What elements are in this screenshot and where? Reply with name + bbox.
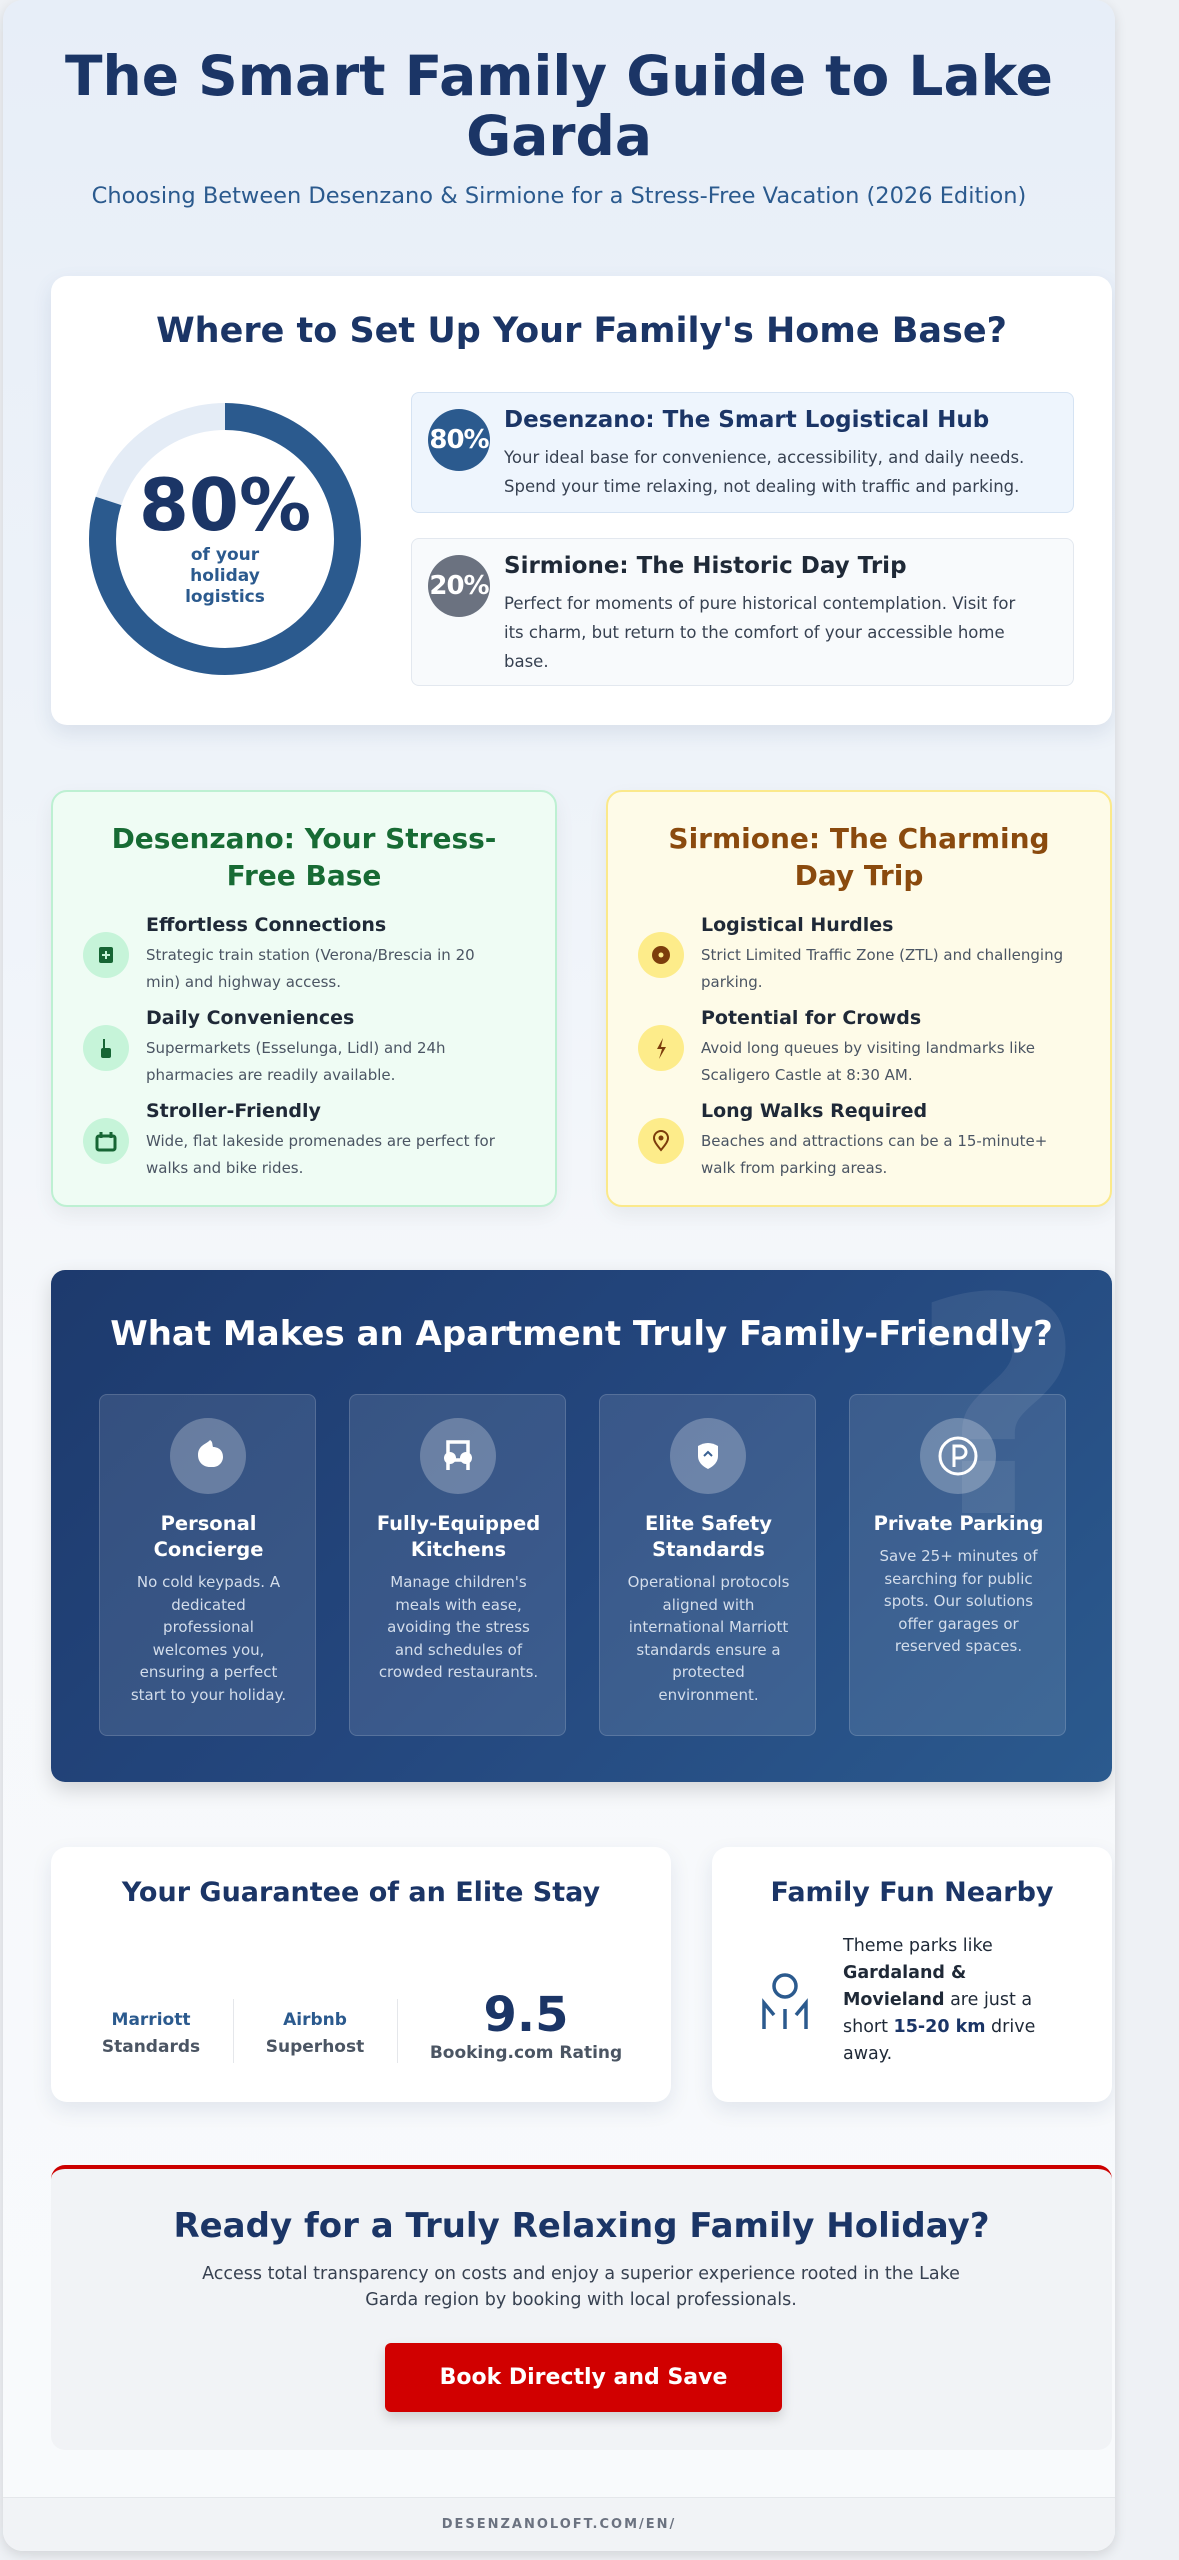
item: conveniences: Daily Conveniences [146, 1007, 354, 1029]
feature: kitchens: Fully-Equipped [377, 1512, 540, 1535]
item: hurdles: Logistical Hurdles [701, 914, 894, 936]
panel: family fun [712, 1847, 1112, 2102]
donut chart 80%: 80% [139, 463, 311, 547]
stat: Airbnb: Superhost [266, 2037, 364, 2057]
option: Desenzano: Desenzano: The Smart Logistical Hub [504, 407, 989, 433]
heading [112, 822, 496, 892]
item: connections: Strategic train station (Verona/Brescia in 20 min) and highway access. [146, 946, 475, 991]
badge 20% [428, 555, 490, 617]
heading: What Makes an Apartment Truly Family-Friendly? [110, 1314, 1053, 1354]
icon: no entry [638, 932, 684, 978]
item: walks: Beaches and attractions can be a 15-minute+ walk from parking areas. [701, 1132, 1047, 1177]
feature: safety: Operational protocols aligned with international Marriott standards ensure a protected environment. [628, 1573, 789, 1704]
item: hurdles: Strict Limited Traffic Zone (ZTL) and challenging parking. [701, 946, 1063, 991]
footer: DESENZANOLOFT.COM/EN/ [442, 2517, 676, 2532]
icon: kitchen [420, 1418, 496, 1494]
panel: Desenzano pros [51, 790, 557, 1207]
item: walks: Long Walks Required [701, 1100, 927, 1122]
feature: kitchens [349, 1394, 566, 1736]
feature: concierge [99, 1394, 316, 1736]
stat: Marriott [102, 2010, 200, 2057]
feature: parking: Private Parking [874, 1512, 1043, 1535]
icon: family [762, 1973, 808, 2029]
badge 80%: 80% [429, 425, 489, 455]
item: connections [83, 914, 475, 991]
feature: concierge: Personal [161, 1512, 256, 1535]
stat: Airbnb: Airbnb [283, 2010, 347, 2030]
option: Sirmione: Perfect for moments of pure historical contemplation. Visit for its charm, but return to the comfort of your accessible home base. [504, 594, 1015, 671]
stat: booking rating [430, 1987, 622, 2063]
option: Sirmione: Sirmione: The Historic Day Trip [504, 553, 907, 579]
heading: Sirmione: The Charming [668, 822, 1050, 855]
feature: safety: Standards [652, 1538, 765, 1561]
stat: Marriott: Standards [102, 2037, 200, 2057]
feature: safety [599, 1394, 816, 1736]
panel: Sirmione cons [606, 790, 1112, 1207]
icon: shop [83, 1025, 129, 1071]
option: Sirmione [411, 538, 1074, 686]
paragraph [202, 2264, 960, 2310]
paragraph: Garda region by booking with local professionals. [365, 2290, 797, 2310]
paragraph: Access total transparency on costs and enjoy a superior experience rooted in the Lake [202, 2264, 960, 2284]
panel: guarantee [51, 1847, 671, 2102]
stat: Airbnb [266, 2010, 364, 2057]
option: Desenzano [411, 392, 1074, 513]
feature: concierge: Concierge [154, 1538, 263, 1561]
option: Desenzano: Your ideal base for convenience, accessibility, and daily needs. Spend your time relaxing, not dealing with traffic and parking. [504, 448, 1024, 496]
icon: shield [670, 1418, 746, 1494]
title: The Smart Family Guide to Lake [65, 44, 1053, 108]
heading: Your Guarantee of an Elite Stay [122, 1877, 600, 1908]
item: crowds: Avoid long queues by visiting landmarks like Scaligero Castle at 8:30 AM. [701, 1039, 1035, 1084]
heading: home base: Where to Set Up Your Family's Home Base? [156, 311, 1007, 351]
icon: stroller [83, 1118, 129, 1164]
feature: safety: Elite Safety [645, 1512, 772, 1535]
heading: Day Trip [795, 859, 923, 892]
icon: parking [920, 1418, 996, 1494]
item: crowds: Potential for Crowds [701, 1007, 921, 1029]
icon: pin [638, 1118, 684, 1164]
badge 80% [428, 409, 490, 471]
feature: concierge: No cold keypads. A dedicated professional welcomes you, ensuring a perfect start to your holiday. [131, 1573, 286, 1704]
panel: call to action [51, 2165, 1112, 2450]
donut chart 80% [89, 403, 361, 675]
stat: booking rating: Booking.com Rating [430, 2043, 622, 2063]
subtitle: Choosing Between Desenzano & Sirmione for a Stress-Free Vacation (2026 Edition) [92, 183, 1026, 209]
panel: home base [51, 276, 1112, 725]
title [65, 44, 1053, 168]
heading [668, 822, 1050, 892]
heading: Family Fun Nearby [770, 1877, 1054, 1908]
heading: Ready for a Truly Relaxing Family Holiday? [173, 2206, 990, 2246]
heading: Free Base [227, 859, 381, 892]
button: Book Directly and Save [440, 2365, 727, 2390]
item: stroller: Wide, flat lakeside promenades are perfect for walks and bike rides. [146, 1132, 495, 1177]
badge 20%: 20% [429, 571, 489, 601]
stat: Marriott: Marriott [112, 2010, 190, 2030]
heading: Desenzano: Your Stress- [112, 822, 496, 855]
item: conveniences [83, 1007, 446, 1084]
feature: kitchens: Manage children's meals with ease, avoiding the stress and schedules of crowded restaurants. [379, 1573, 538, 1681]
panel: family-friendly features [51, 1270, 1112, 1782]
item: walks [638, 1100, 1047, 1177]
item: connections: Effortless Connections [146, 914, 386, 936]
item: crowds [638, 1007, 1035, 1084]
icon: train [83, 932, 129, 978]
title: Garda [466, 104, 652, 168]
feature: parking [849, 1394, 1066, 1736]
button [385, 2343, 782, 2412]
item: hurdles [638, 914, 1063, 991]
footer [3, 2497, 1115, 2551]
icon: bolt [638, 1025, 684, 1071]
text: Theme parks like Gardaland & Movieland are just a short 15-20 km drive away. [843, 1936, 1035, 2064]
item: stroller [83, 1100, 495, 1177]
feature: parking: Save 25+ minutes of searching for public spots. Our solutions offer garages or reserved spaces. [880, 1547, 1037, 1655]
icon: concierge bell [170, 1418, 246, 1494]
feature: kitchens: Kitchens [411, 1538, 506, 1561]
donut chart 80%: of your holiday logistics [185, 545, 265, 607]
item: stroller: Stroller-Friendly [146, 1100, 321, 1122]
item: conveniences: Supermarkets (Esselunga, Lidl) and 24h pharmacies are readily available. [146, 1039, 446, 1084]
stat: booking rating: 9.5 [483, 1987, 569, 2043]
